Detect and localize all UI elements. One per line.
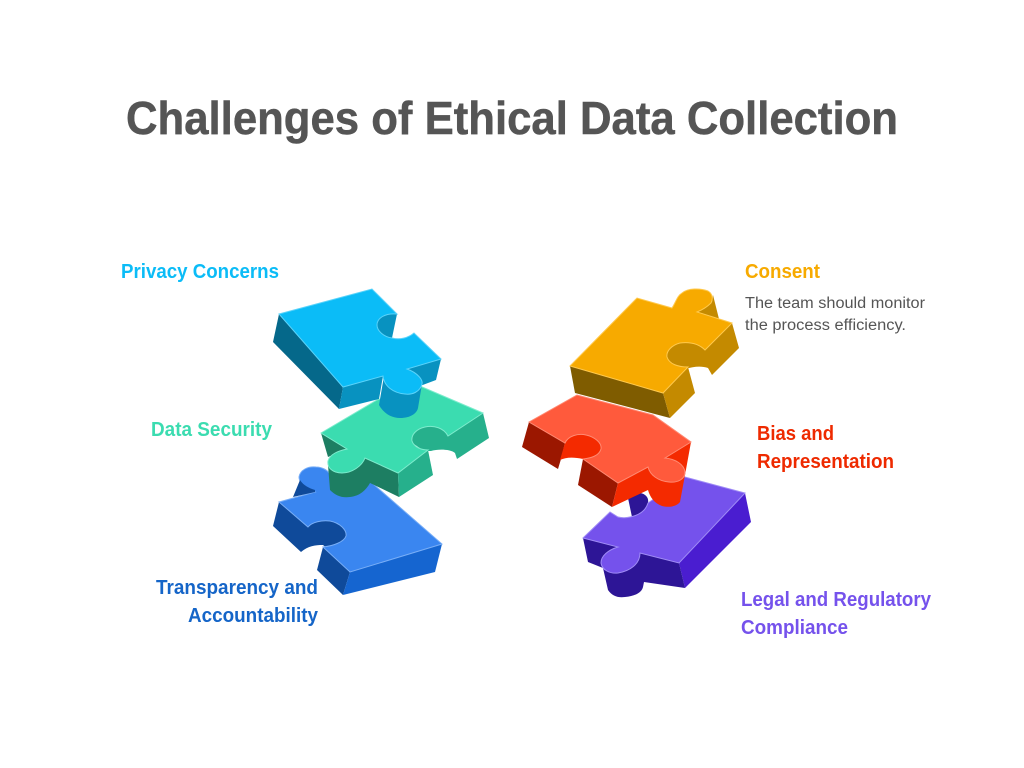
- label: Consent with description: The team should monitor: [745, 295, 925, 312]
- label: Transparency and Accountability: [156, 577, 319, 627]
- label: Legal and Regulatory Compliance: Legal and Regulatory: [741, 589, 932, 611]
- label: Bias and Representation: Representation: [757, 451, 894, 473]
- title: Challenges of Ethical Data Collection: [126, 92, 898, 144]
- puzzle piece: Legal and Regulatory Compliance: [583, 477, 751, 597]
- label: Transparency and Accountability: Accountability: [188, 605, 319, 627]
- label: Privacy Concerns: Privacy Concerns: [121, 261, 279, 283]
- puzzle piece: Transparency and Accountability: [273, 467, 442, 595]
- label: Consent with description: the process efficiency.: [745, 317, 906, 334]
- label: Bias and Representation: Bias and: [757, 423, 834, 445]
- puzzle piece: Consent: [570, 289, 739, 418]
- label: Bias and Representation: [757, 423, 894, 473]
- puzzle piece: Privacy Concerns: [273, 289, 441, 418]
- label: Data Security: Data Security: [151, 419, 273, 441]
- label: Consent with description: [745, 261, 925, 334]
- label: Legal and Regulatory Compliance: Compliance: [741, 617, 848, 639]
- puzzle piece: Data Security: [321, 386, 489, 497]
- puzzle piece: Bias and Representation: [522, 395, 691, 507]
- label: Legal and Regulatory Compliance: [741, 589, 932, 639]
- label: Consent with description: Consent: [745, 261, 820, 283]
- label: Transparency and Accountability: Transparency and: [156, 577, 318, 599]
